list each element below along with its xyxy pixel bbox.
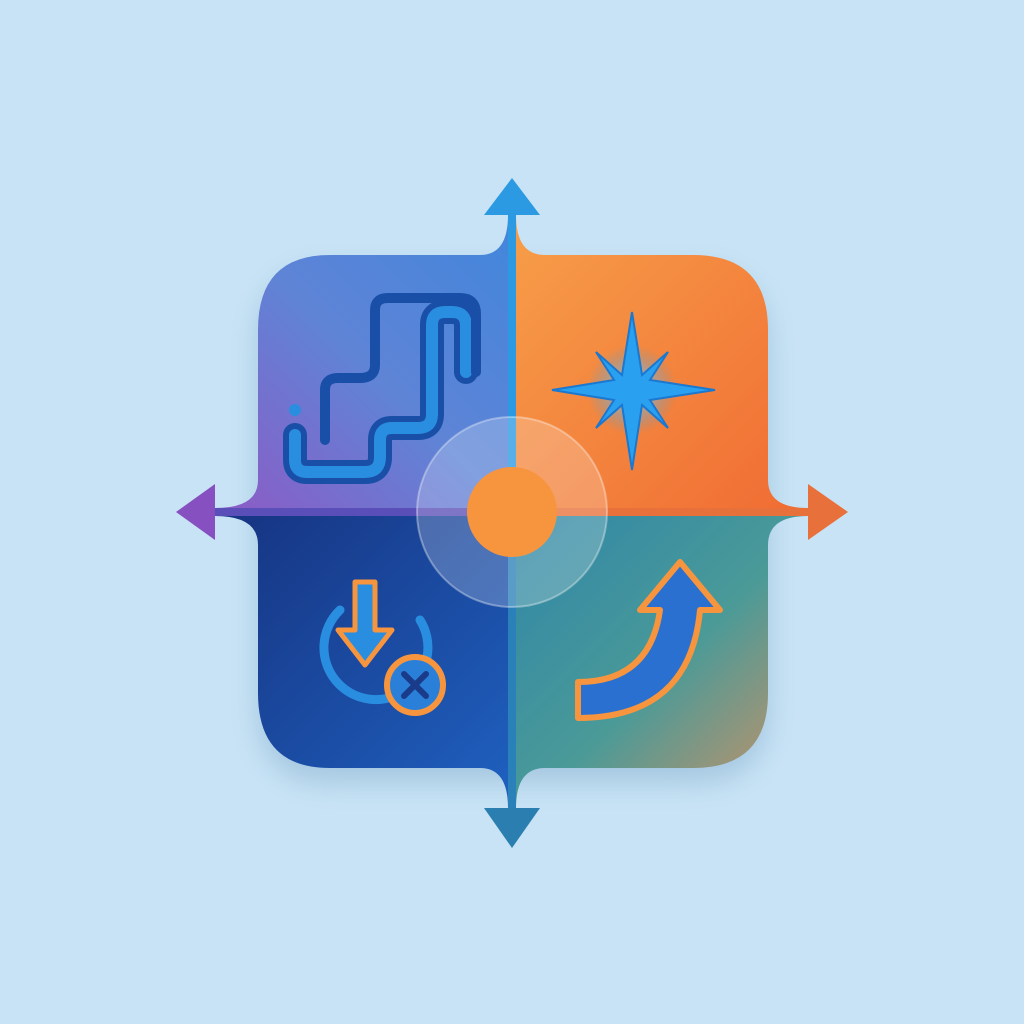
arrow: right [808, 484, 848, 540]
shadow [258, 270, 768, 783]
arrow: left [176, 484, 215, 540]
panel: top-right [516, 216, 807, 508]
icon: sparkle star [552, 312, 715, 470]
arrow: bottom [484, 808, 540, 848]
icon: squiggle path [289, 298, 476, 472]
panel group: quadrants [200, 200, 824, 824]
center circle [417, 417, 607, 607]
panel: bottom-right [516, 516, 806, 806]
icon: power down with x [324, 582, 443, 713]
panel: top-left [216, 216, 508, 508]
icon: curved up arrow [578, 562, 720, 718]
arrow: top [484, 178, 540, 215]
panel: bottom-left [216, 516, 508, 807]
